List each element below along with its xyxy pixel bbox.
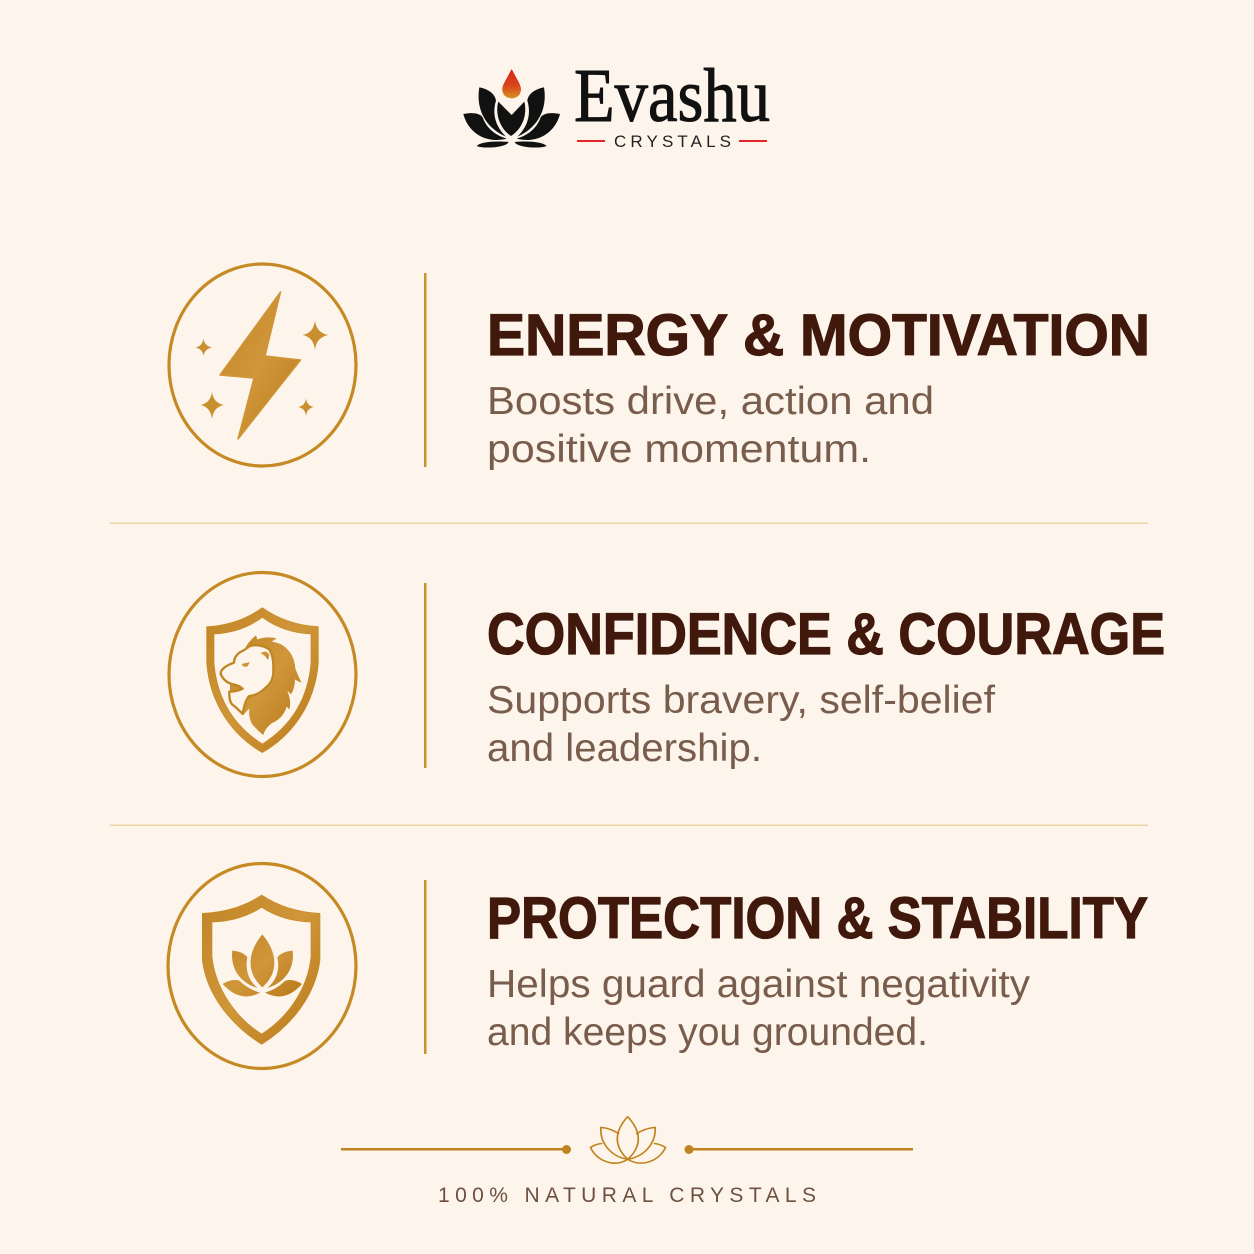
description: and leadership. [487, 727, 762, 770]
brand subtitle: CRYSTALS [614, 132, 731, 151]
heading: PROTECTION & STABILITY [487, 886, 1148, 951]
icon: lion shield in circle [169, 572, 356, 776]
divider [424, 273, 426, 467]
icon: lotus with red drop [463, 69, 560, 148]
panel: protection and stability [168, 864, 1148, 1068]
heading: CONFIDENCE & COURAGE [487, 602, 1165, 667]
brand name: Evashu [574, 54, 770, 138]
footer [341, 1117, 913, 1207]
description: Supports bravery, self-belief [487, 679, 995, 722]
panel: confidence and courage [169, 572, 1165, 776]
description: positive momentum. [487, 428, 871, 471]
heading: ENERGY & MOTIVATION [487, 303, 1150, 368]
panel: energy and motivation [169, 264, 1150, 471]
icon: lotus shield in circle [168, 864, 356, 1068]
logo: Evashu Crystals [463, 54, 770, 151]
divider [424, 880, 426, 1054]
description: and keeps you grounded. [487, 1011, 928, 1054]
footer ornament: lines and lotus [341, 1117, 913, 1163]
divider [424, 583, 426, 768]
footer tagline: 100% NATURAL CRYSTALS [438, 1184, 816, 1207]
description: Helps guard against negativity [487, 963, 1031, 1006]
description: Boosts drive, action and [487, 380, 934, 423]
icon: lightning bolt in circle [169, 264, 356, 466]
